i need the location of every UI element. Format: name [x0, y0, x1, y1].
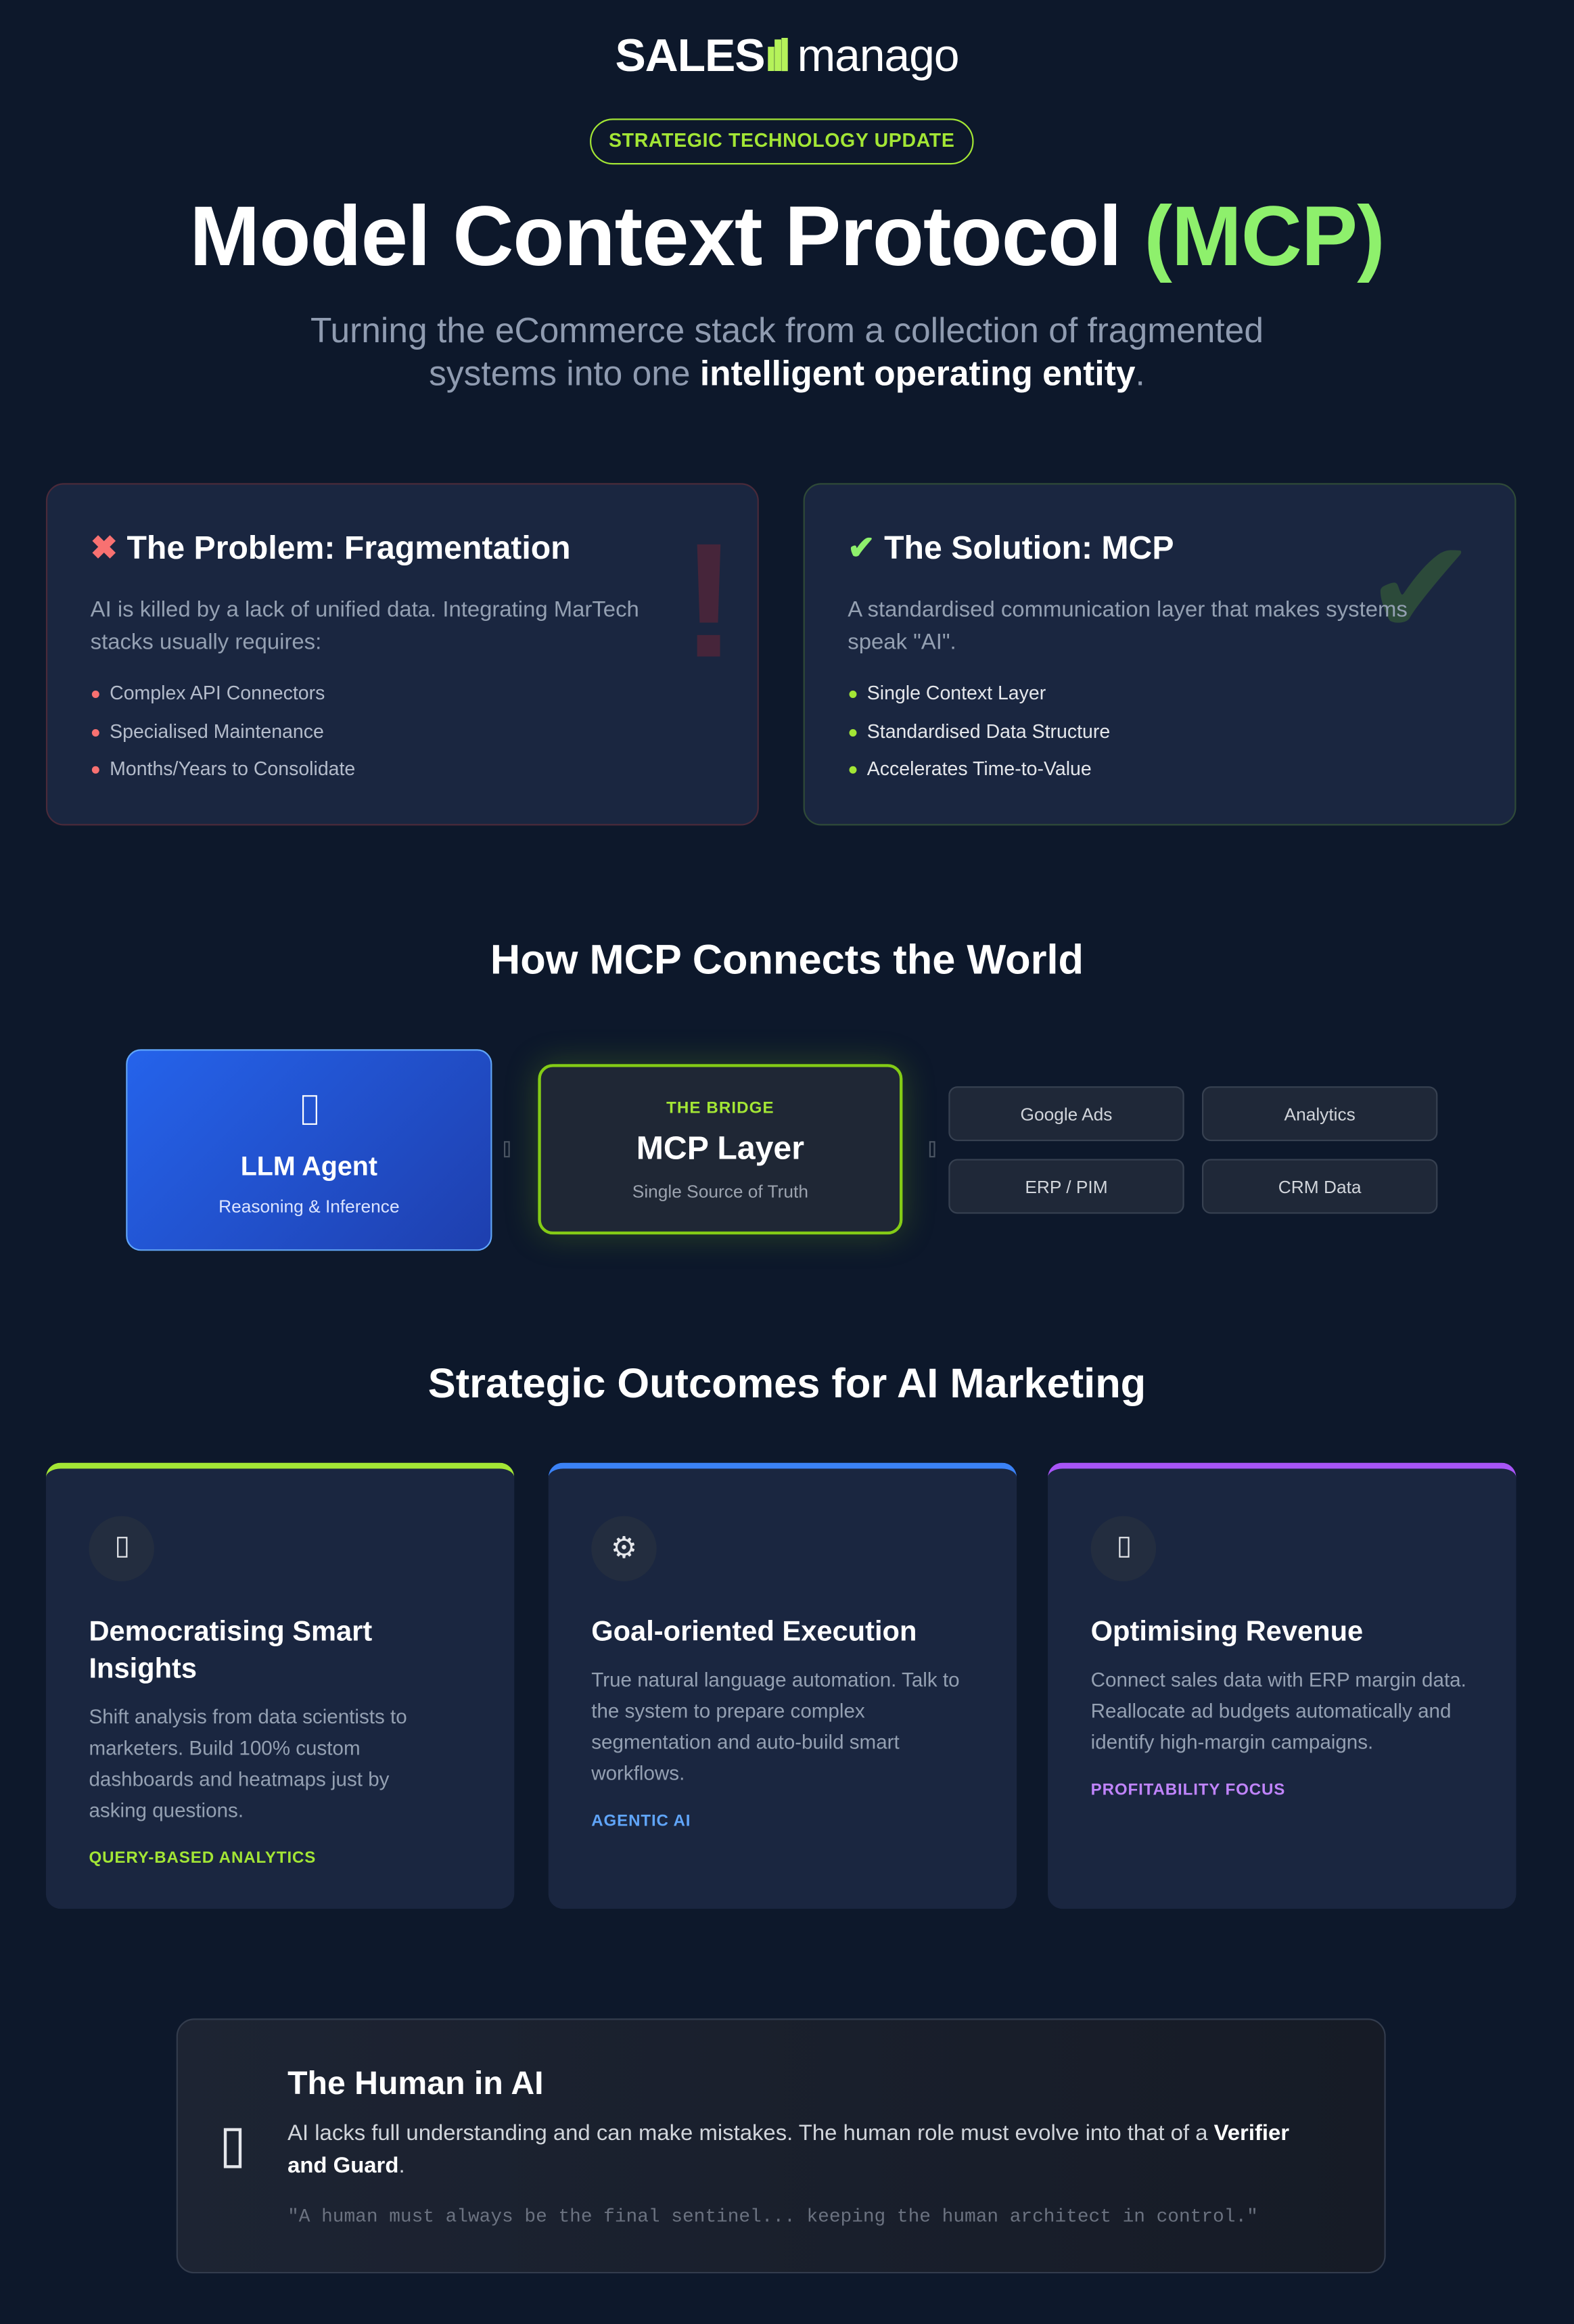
box: MCP layer: MCP Layer [636, 1130, 804, 1166]
grid: systems: Analytics [1284, 1104, 1356, 1125]
subtitle: Turning the eCommerce stack from a collection of fragmented [310, 311, 1264, 350]
logo: SALESıIl manago [615, 30, 958, 82]
grid: systems: ERP / PIM [1025, 1177, 1108, 1197]
card: optimising revenue: Connect sales data with ERP margin data. Reallocate ad budgets automatically and identify high-margin campaigns. [1091, 1669, 1466, 1753]
card: goal-oriented execution: Goal-oriented Execution [591, 1617, 917, 1648]
grid: systems [948, 1086, 1438, 1213]
pill: strategic technology update [590, 118, 974, 164]
icon: shield [224, 2128, 241, 2168]
list: solution bullets: Single Context Layer [867, 682, 1046, 704]
card: goal-oriented execution [549, 1463, 1017, 1909]
heading: solution: ✔ The Solution: MCP [848, 529, 1174, 566]
list: problem bullets: Complex API Connectors [110, 682, 325, 704]
pill: strategic technology update: STRATEGIC TECHNOLOGY UPDATE [609, 129, 955, 151]
grid: systems: Google Ads [1021, 1104, 1112, 1125]
panel: human in AI: "A human must always be the final sentinel... keeping the human architect in control." [287, 2205, 1258, 2227]
list: problem bullets: Months/Years to Consolidate [110, 758, 355, 780]
list: problem bullets [92, 682, 355, 780]
heading: how MCP connects: How MCP Connects the World [490, 937, 1084, 983]
list: problem bullets: Specialised Maintenance [110, 720, 324, 743]
card: democratising insights: Shift analysis from data scientists to marketers. Build 100% custom dashboards and heatmaps just by asking questions. [89, 1706, 407, 1821]
box: MCP layer [538, 1064, 902, 1234]
card: goal-oriented execution: ⚙ [611, 1533, 637, 1565]
heading: strategic outcomes: Strategic Outcomes for AI Marketing [428, 1360, 1146, 1406]
subtitle [310, 311, 1264, 393]
card: optimising revenue [1048, 1463, 1516, 1909]
card: goal-oriented execution: True natural language automation. Talk to the system to prepare complex segmentation and auto-build smart workflows. [591, 1669, 960, 1784]
box: LLM agent [126, 1049, 492, 1251]
arrow: MCP to systems [929, 1141, 935, 1157]
card: optimising revenue: Optimising Revenue [1091, 1617, 1363, 1648]
panel: solution [804, 483, 1516, 825]
card: democratising insights: QUERY-BASED ANALYTICS [89, 1849, 316, 1867]
card: democratising insights: Democratising Smart Insights [89, 1617, 372, 1685]
arrow: agent to MCP [504, 1141, 510, 1157]
box: MCP layer: Single Source of Truth [632, 1181, 808, 1202]
list: solution bullets: Standardised Data Structure [867, 720, 1110, 743]
box: LLM agent: LLM Agent [241, 1151, 377, 1181]
box: MCP layer: THE BRIDGE [666, 1100, 774, 1117]
icon: check watermark: ✔ [1365, 516, 1477, 664]
text: problem body: AI is killed by a lack of unified data. Integrating MarTech stacks usually requires: [91, 597, 639, 655]
list: solution bullets: Accelerates Time-to-Value [867, 758, 1092, 780]
panel: human in AI: The Human in AI [287, 2064, 544, 2101]
panel: human in AI: AI lacks full understanding and can make mistakes. The human role must evolve into that of a Verifier and Guard. [287, 2120, 1289, 2179]
box: LLM agent: Reasoning & Inference [218, 1196, 400, 1217]
icon: exclamation watermark: ! [682, 510, 736, 692]
panel: problem [46, 483, 759, 825]
heading: problem: ✖ The Problem: Fragmentation [91, 529, 571, 566]
icon: robot [302, 1095, 317, 1125]
title: Model Context Protocol (MCP) [189, 189, 1385, 285]
card: democratising insights [46, 1463, 514, 1909]
card: goal-oriented execution: AGENTIC AI [591, 1813, 691, 1830]
panel: human in AI [177, 2018, 1386, 2273]
subtitle: systems into one intelligent operating entity. [429, 354, 1145, 393]
grid: systems: CRM Data [1278, 1177, 1362, 1197]
list: solution bullets [850, 682, 1110, 780]
text: solution body: A standardised communication layer that makes systems speak "AI". [848, 597, 1408, 655]
card: optimising revenue: PROFITABILITY FOCUS [1091, 1782, 1285, 1799]
